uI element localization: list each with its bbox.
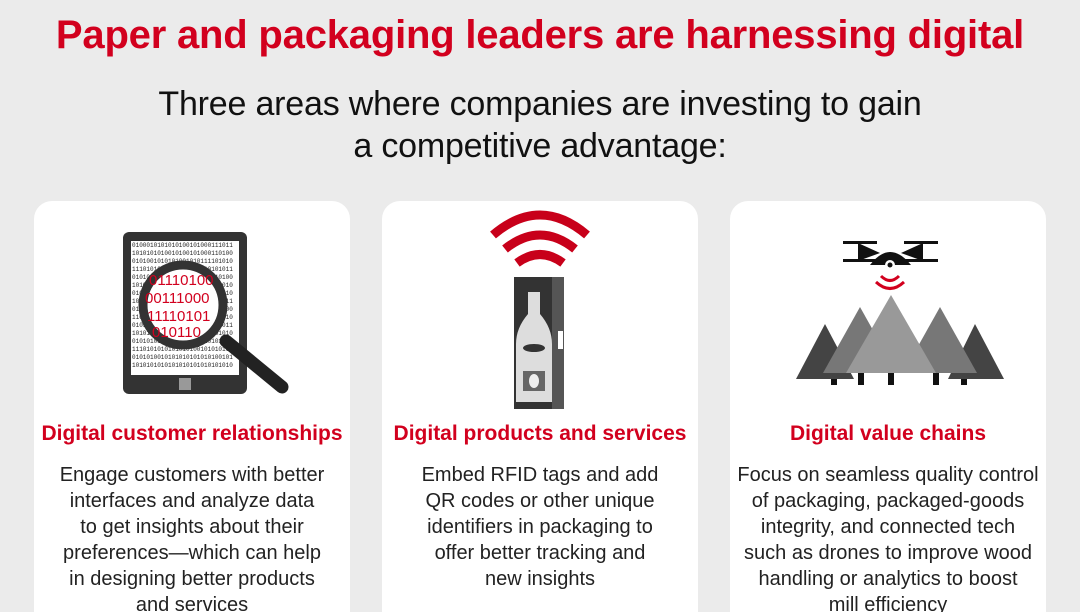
icon: tablet with magnifier: 0101001010101010010101010100 bbox=[132, 306, 233, 313]
icon: tablet with magnifier: 0101010010101010101010100101 bbox=[132, 354, 233, 361]
icon: tablet with magnifier: 010110 bbox=[152, 324, 201, 341]
panel: products and services bbox=[382, 201, 698, 612]
heading: Digital products and services bbox=[394, 422, 686, 445]
icon: tablet with magnifier: 1010101001010101010101001010 bbox=[132, 330, 233, 337]
text: Focus on seamless quality control bbox=[737, 464, 1039, 486]
text: QR codes or other unique bbox=[425, 490, 655, 512]
subtitle: Three areas where companies are investing to gain bbox=[158, 85, 922, 123]
icon: tablet with magnifier: 0101010101010101010010101011 bbox=[132, 322, 233, 329]
text: Engage customers with better bbox=[60, 464, 324, 486]
icon: drone over trees bbox=[796, 241, 1004, 385]
text: integrity, and connected tech bbox=[761, 516, 1015, 538]
text: new insights bbox=[485, 568, 595, 590]
text: preferences—which can help bbox=[63, 542, 321, 564]
icon: tablet with magnifier: 00111000 bbox=[145, 290, 210, 307]
text: to get insights about their bbox=[80, 516, 304, 538]
icon: tablet with magnifier: 11110101 bbox=[147, 308, 210, 325]
icon: tablet with magnifier: 01110100 bbox=[149, 272, 214, 289]
icon: tablet with magnifier: 1101010101001010101010101010 bbox=[132, 314, 233, 321]
text: identifiers in packaging to bbox=[427, 516, 653, 538]
text bbox=[60, 464, 324, 612]
text: handling or analytics to boost bbox=[758, 568, 1018, 590]
icon: tablet with magnifier: 0100010101010100101000111011 bbox=[132, 242, 233, 249]
title: Paper and packaging leaders are harnessing digital bbox=[56, 13, 1024, 57]
text bbox=[737, 464, 1039, 612]
icon: tablet with magnifier: 0101010010101010101010101010 bbox=[132, 290, 233, 297]
text: offer better tracking and bbox=[435, 542, 645, 564]
subtitle: a competitive advantage: bbox=[353, 127, 727, 165]
text: of packaging, packaged-goods bbox=[752, 490, 1024, 512]
icon: tablet with magnifier: 1010101010100101010101001010 bbox=[132, 282, 233, 289]
icon: wifi bottle box bbox=[490, 210, 590, 409]
text: such as drones to improve wood bbox=[744, 542, 1032, 564]
icon: tablet with magnifier: 0101010101010010101010101010 bbox=[132, 338, 233, 345]
text: interfaces and analyze data bbox=[70, 490, 314, 512]
icon: tablet with magnifier: 1110101010101010100101010101 bbox=[132, 346, 233, 353]
icon: tablet with magnifier: 1110101010010101001010101011 bbox=[132, 266, 233, 273]
panel: customer relationships bbox=[34, 201, 350, 612]
text: in designing better products bbox=[69, 568, 315, 590]
icon: tablet with magnifier: 1010101010100101010100101011 bbox=[132, 298, 233, 305]
subtitle bbox=[158, 85, 922, 165]
icon: tablet with magnifier: 0101001010101001010111101010 bbox=[132, 258, 233, 265]
heading: Digital customer relationships bbox=[41, 422, 343, 445]
text: Embed RFID tags and add bbox=[422, 464, 658, 486]
heading: Digital value chains bbox=[790, 422, 986, 445]
icon: tablet with magnifier: 0101010100101010010101010100 bbox=[132, 274, 233, 281]
icon: tablet with magnifier bbox=[123, 232, 288, 394]
icon: tablet with magnifier: 1010101010010100101000110100 bbox=[132, 250, 233, 257]
panel: value chains bbox=[730, 201, 1046, 612]
text bbox=[422, 464, 658, 590]
icon: tablet with magnifier: 1010101010101010101010101010 bbox=[132, 362, 233, 369]
